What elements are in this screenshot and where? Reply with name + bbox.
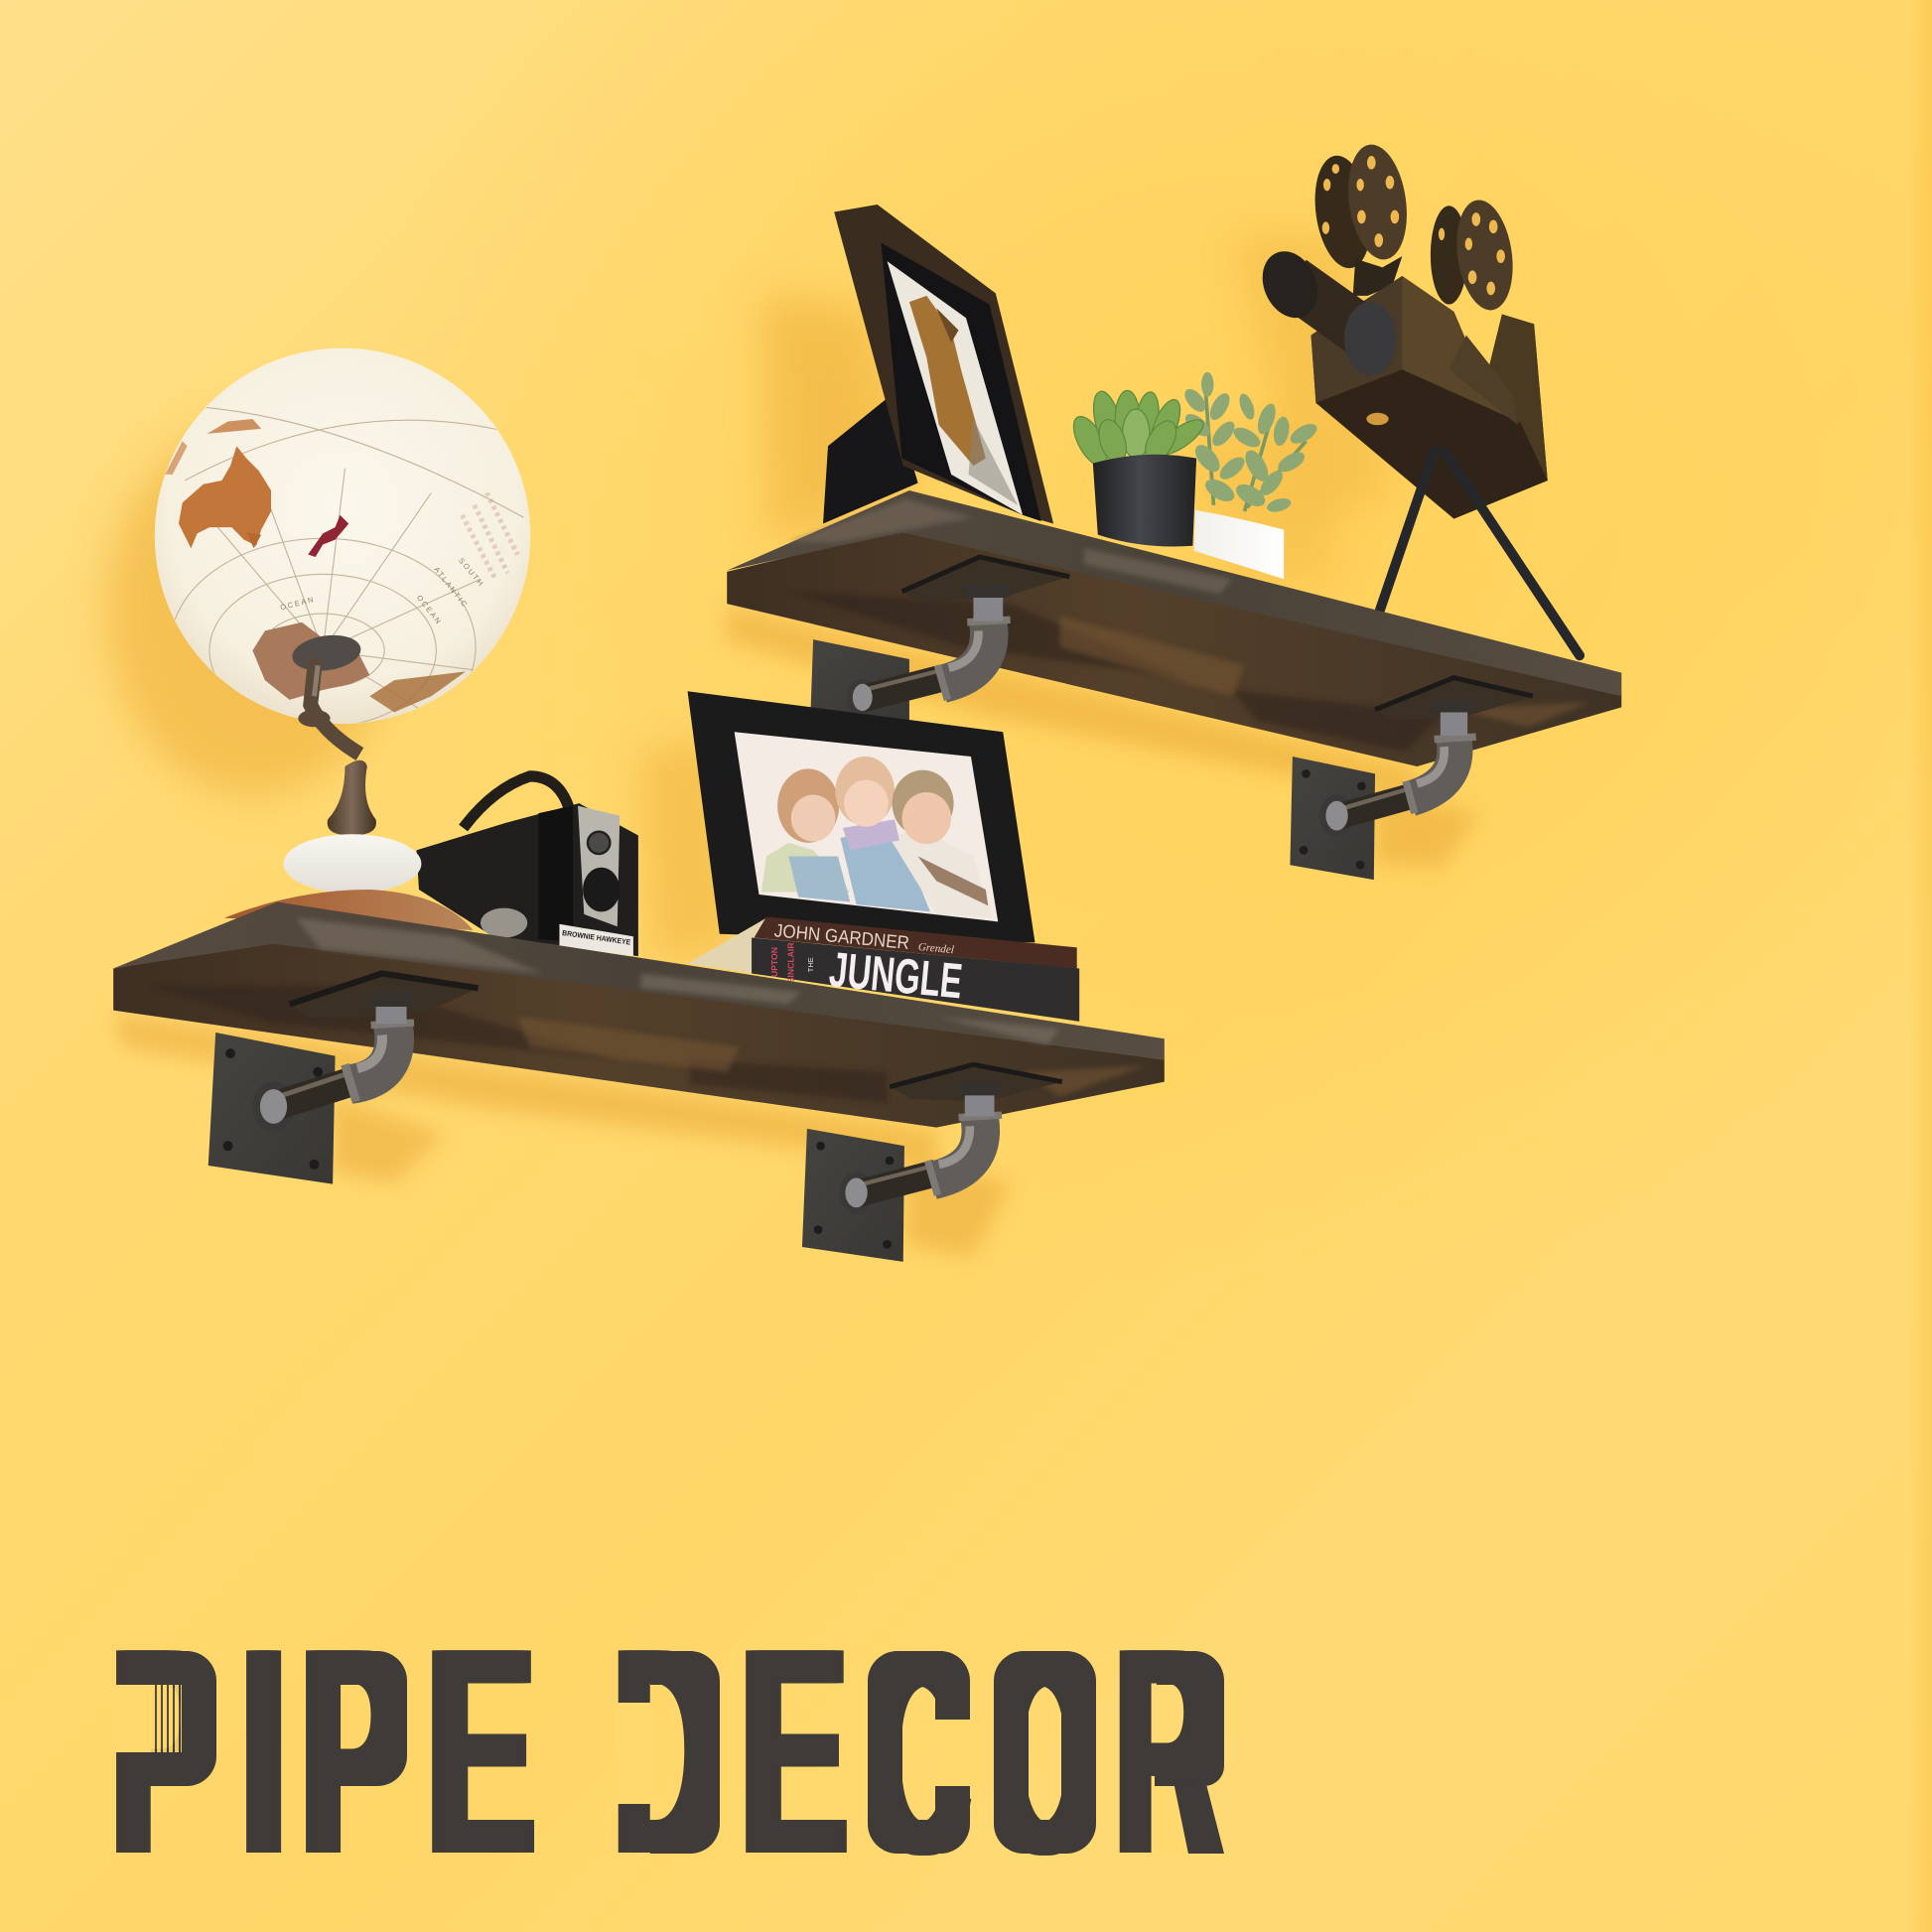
- pipe: [839, 1082, 1002, 1213]
- bracket: upper left: [811, 557, 1069, 727]
- wooden base: [224, 890, 474, 930]
- book: The Jungle: SINCLAIR: [785, 942, 795, 983]
- shelf flange: [901, 557, 1069, 602]
- pipe: [847, 584, 1011, 716]
- ocean labels: OCEAN: [279, 595, 316, 612]
- camera label: BROWNIE HAWKEYE: [562, 928, 631, 947]
- book: Grendel: [755, 916, 1077, 968]
- upper shelf: [727, 490, 1621, 766]
- Tasmania: [246, 532, 261, 548]
- dog photo: [888, 261, 1023, 515]
- wall plate: [811, 639, 909, 727]
- family picture frame: [688, 691, 1035, 942]
- title: PIPE DECOR logo: C: [870, 1594, 969, 1913]
- title: PIPE DECOR logo: [116, 1650, 1224, 1856]
- pipe: [252, 993, 414, 1131]
- frame stand: [823, 394, 918, 523]
- polar calendar disc: [290, 631, 363, 675]
- book: The Jungle: JUNGLE: [827, 941, 965, 1009]
- wall plate: [802, 1129, 904, 1262]
- white marble knob: [283, 834, 421, 894]
- South America coast marks: [462, 492, 517, 579]
- ocean labels: OCEAN: [415, 594, 444, 626]
- bracket: upper right: [1290, 678, 1533, 880]
- winding knob: [481, 908, 527, 937]
- title: PIPE DECOR logo: O: [996, 1594, 1094, 1913]
- shelf underside: [113, 942, 1165, 1128]
- South America tip: [369, 671, 466, 712]
- globe: [155, 348, 530, 930]
- Southeast Asia islands: [207, 419, 261, 434]
- projector lens: [1252, 242, 1396, 376]
- film reels: [1309, 141, 1519, 314]
- stacked books: [688, 916, 1079, 1022]
- globe sphere: [155, 348, 530, 756]
- page block: [688, 918, 766, 973]
- family photo: [735, 732, 998, 921]
- film projector decor: [1252, 141, 1580, 655]
- sage plant and white pot: [1180, 372, 1320, 579]
- pipe: [1319, 700, 1476, 837]
- shelf flange: [890, 1064, 1062, 1102]
- plants: [1067, 372, 1320, 579]
- reel arms: [1353, 256, 1402, 296]
- camera front plate: [578, 806, 620, 926]
- title: PIPE DECOR logo: I: [242, 1587, 285, 1915]
- book: The Jungle: THE: [806, 957, 815, 972]
- book: Grendel: JOHN GARDNER: [773, 919, 910, 953]
- Australia: [179, 446, 271, 548]
- globe stand stem: [328, 760, 376, 835]
- book: Grendel: Grendel: [917, 941, 954, 956]
- meridian grid: [175, 407, 524, 723]
- title: PIPE DECOR logo: R: [1116, 1587, 1217, 1915]
- tripod legs: [1380, 451, 1580, 655]
- ocean labels: SOUTH: [457, 556, 486, 589]
- camera strap: [464, 776, 571, 828]
- tall picture frame with dog photo: [823, 205, 1053, 523]
- lower shelf: [113, 901, 1165, 1128]
- camera label: [559, 924, 633, 956]
- title: PIPE DECOR logo: E: [428, 1587, 534, 1915]
- New Zealand: [308, 515, 348, 557]
- succulent and black pot: [1067, 388, 1208, 547]
- bracket: lower right: [802, 1064, 1062, 1262]
- wall plate: [1290, 757, 1375, 880]
- bracket: lower left: [208, 973, 479, 1184]
- shelf underside: [727, 530, 1621, 766]
- shelf front lip: [727, 490, 1621, 696]
- title: PIPE DECOR logo: P: [302, 1587, 404, 1915]
- book: The Jungle: UPTON: [769, 947, 779, 977]
- title: PIPE DECOR logo: D: [615, 1587, 717, 1915]
- frame: [688, 691, 1035, 942]
- globe arm: [298, 659, 359, 755]
- shelf flange: [290, 973, 479, 1018]
- ocean labels: ATLANTIC: [432, 565, 470, 610]
- title: PIPE DECOR logo: E: [742, 1587, 846, 1915]
- wall plate: [208, 1033, 336, 1184]
- camera body: [416, 803, 638, 956]
- vintage box camera: [416, 776, 638, 956]
- wall shadows: [107, 234, 1478, 1257]
- title: PIPE DECOR logo: P: [112, 1587, 213, 1915]
- shelf front lip: [113, 901, 1165, 1059]
- Antarctica: [252, 622, 369, 700]
- projector body: [1311, 276, 1548, 518]
- ocean labels: [279, 556, 486, 626]
- book: The Jungle: [752, 937, 1079, 1022]
- shelf flange: [1375, 678, 1533, 720]
- frame: [834, 205, 1053, 523]
